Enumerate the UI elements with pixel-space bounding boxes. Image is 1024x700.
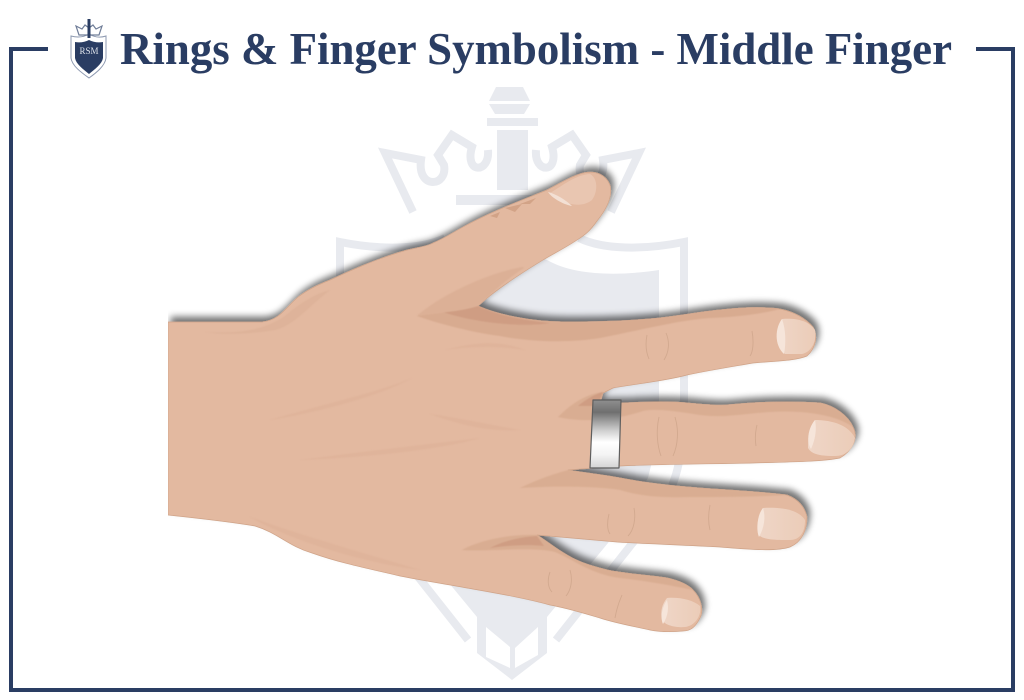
watermark crest xyxy=(340,87,684,680)
fingernail: middle xyxy=(808,420,855,456)
thumb knuckle wrinkles xyxy=(490,198,536,218)
title: Rings & Finger Symbolism - Middle Finger xyxy=(120,23,952,74)
hand shape xyxy=(168,172,855,632)
thumbnail xyxy=(550,174,596,205)
hand illustration xyxy=(168,172,855,632)
logo shield xyxy=(71,19,106,78)
sword xyxy=(456,87,569,205)
creases xyxy=(548,331,757,618)
crown xyxy=(385,135,639,212)
fingernail: index xyxy=(777,319,815,354)
shield band xyxy=(340,238,684,640)
fingernail: pinky xyxy=(661,598,700,627)
ring xyxy=(590,400,621,468)
logo monogram: RSM xyxy=(79,46,99,56)
shield fill xyxy=(365,245,659,680)
fingernail: ring xyxy=(757,508,805,540)
knuckle shading xyxy=(418,268,853,590)
